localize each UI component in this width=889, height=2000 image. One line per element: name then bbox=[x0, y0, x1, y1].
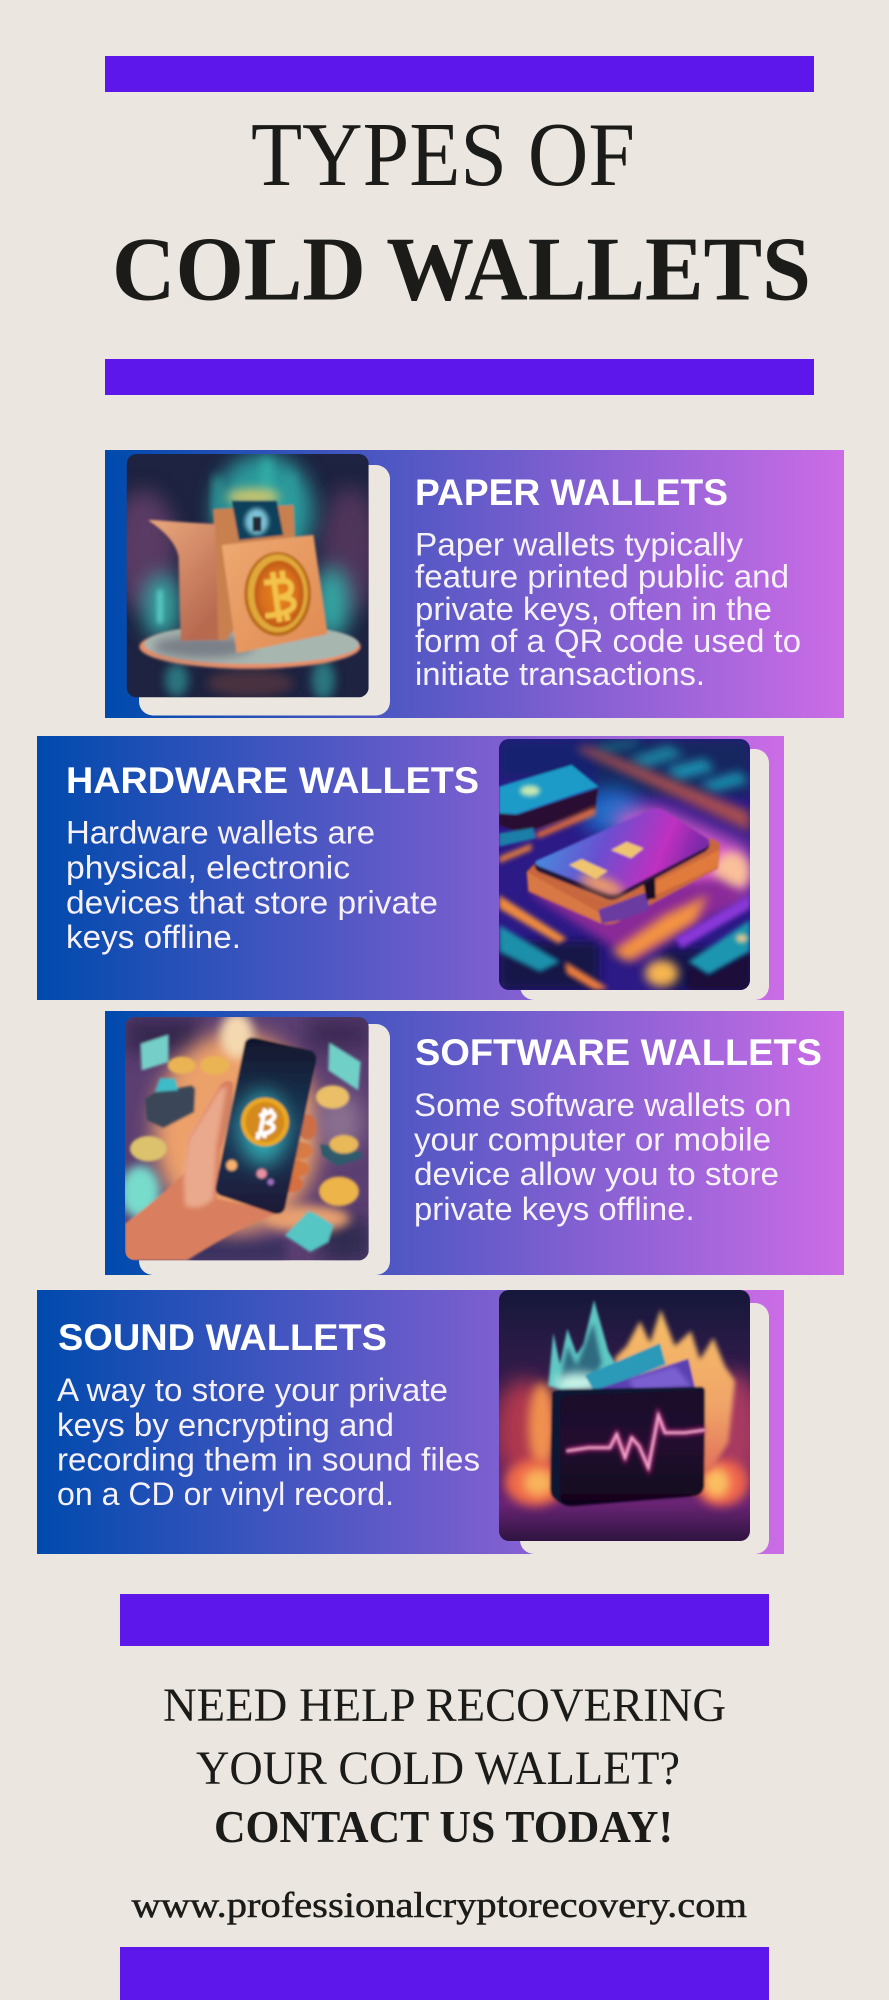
image backing card bbox=[520, 1303, 769, 1554]
small wallet bbox=[145, 1085, 195, 1128]
pulse line glow bbox=[567, 1415, 705, 1468]
top bar 1 bbox=[105, 56, 814, 92]
floating items bbox=[141, 1035, 168, 1070]
body: paper wallets: feature printed public and bbox=[415, 559, 789, 595]
keyboard keys top right bbox=[628, 745, 685, 768]
phone bbox=[215, 1037, 316, 1214]
body: hardware wallets: keys offline. bbox=[66, 919, 241, 955]
image backing card bbox=[520, 749, 769, 1000]
glow around device bbox=[612, 807, 750, 912]
image backing card bbox=[139, 465, 390, 716]
image: hand holding phone bbox=[120, 1012, 370, 1262]
body: hardware wallets: physical, electronic bbox=[66, 849, 350, 885]
panel: paper wallets bbox=[105, 450, 844, 718]
fingers bbox=[298, 1114, 317, 1140]
wallet body bbox=[550, 1387, 705, 1506]
body: paper wallets: initiate transactions. bbox=[415, 656, 705, 692]
image: hardware wallet device bbox=[499, 739, 750, 990]
body: hardware wallets: devices that store private bbox=[66, 884, 438, 920]
call to action bbox=[163, 1679, 726, 1852]
QR card bbox=[232, 501, 283, 540]
title: TYPES OF bbox=[251, 104, 635, 205]
panel: hardware wallets bbox=[37, 736, 784, 1000]
top bar 2 bbox=[105, 359, 814, 395]
bottom bar 1 bbox=[120, 1594, 769, 1646]
image: wallet with sound wave bbox=[495, 1290, 762, 1541]
left key 2 bbox=[499, 828, 536, 847]
title bbox=[112, 104, 811, 320]
bottom bar 2 bbox=[120, 1947, 769, 2000]
heading: sound wallets: SOUND WALLETS bbox=[58, 1317, 387, 1358]
call to action: YOUR COLD WALLET? bbox=[196, 1742, 680, 1795]
teal spikes bbox=[548, 1300, 617, 1389]
body: software wallets: Some software wallets on bbox=[414, 1087, 792, 1123]
bottom keys bbox=[499, 925, 560, 972]
title: COLD WALLETS bbox=[112, 218, 811, 320]
body: paper wallets: Paper wallets typically bbox=[415, 527, 743, 563]
call to action: CONTACT US TODAY! bbox=[214, 1801, 673, 1852]
body: software wallets: private keys offline. bbox=[414, 1191, 695, 1227]
image: paper wallet with bitcoin coin bbox=[126, 454, 369, 698]
body: sound wallets: keys by encrypting and bbox=[57, 1407, 394, 1443]
heading: software wallets: SOFTWARE WALLETS bbox=[415, 1032, 822, 1073]
back pocket bbox=[213, 505, 295, 640]
cards in wallet bbox=[585, 1343, 666, 1393]
panel: sound wallets bbox=[37, 1290, 784, 1554]
body: paper wallets bbox=[415, 527, 801, 692]
orange stripe bbox=[575, 747, 750, 832]
body: hardware wallets: Hardware wallets are bbox=[66, 815, 375, 851]
body: sound wallets: A way to store your private bbox=[57, 1372, 448, 1408]
image backing card bbox=[139, 1024, 390, 1275]
chips bbox=[569, 859, 608, 879]
hand bbox=[125, 1081, 280, 1260]
body: sound wallets: on a CD or vinyl record. bbox=[57, 1476, 394, 1512]
body: sound wallets bbox=[57, 1372, 480, 1512]
body: sound wallets: recording them in sound files bbox=[57, 1442, 480, 1478]
body: software wallets bbox=[414, 1087, 792, 1227]
call to action: NEED HELP RECOVERING bbox=[163, 1679, 726, 1732]
teal block bbox=[285, 1211, 333, 1252]
heading: paper wallets: PAPER WALLETS bbox=[415, 472, 728, 513]
platform bbox=[139, 625, 361, 669]
front card bbox=[222, 535, 327, 653]
body: hardware wallets bbox=[66, 815, 438, 955]
bitcoin coin bbox=[244, 552, 311, 636]
pulse line bbox=[567, 1415, 705, 1468]
lower glows bbox=[499, 895, 567, 943]
body: software wallets: device allow you to store bbox=[414, 1156, 779, 1192]
orange spikes bbox=[615, 1309, 735, 1473]
device top bbox=[533, 843, 711, 902]
device body bbox=[527, 838, 720, 924]
body: paper wallets: form of a QR code used to bbox=[415, 623, 801, 659]
left flap bbox=[148, 520, 218, 641]
top left key bbox=[499, 765, 598, 814]
bitcoin coin bbox=[241, 1098, 289, 1146]
heading: hardware wallets: HARDWARE WALLETS bbox=[66, 760, 479, 801]
floor glows bbox=[505, 1459, 565, 1506]
body: software wallets: your computer or mobile bbox=[414, 1122, 771, 1158]
panel: software wallets bbox=[105, 1011, 844, 1275]
body: paper wallets: private keys, often in the bbox=[415, 591, 772, 627]
website url: www.professionalcryptorecovery.com bbox=[132, 1885, 747, 1925]
